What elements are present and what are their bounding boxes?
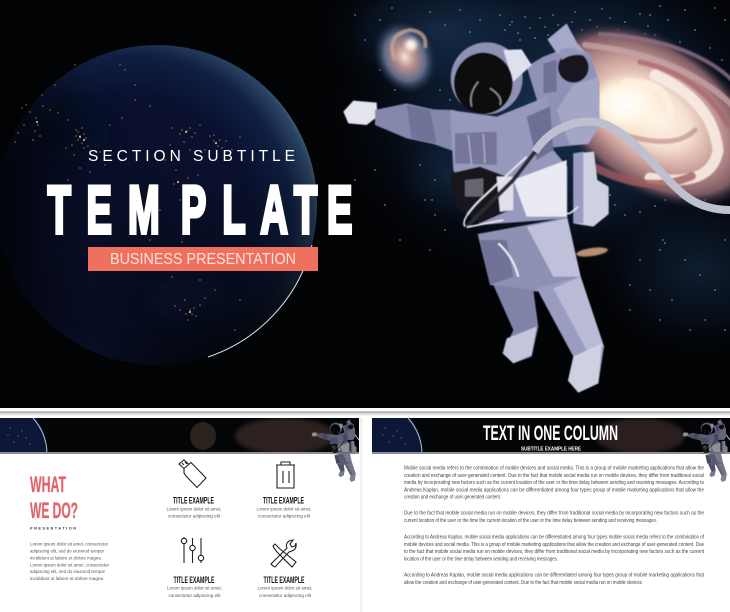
main title: A <box>260 171 288 248</box>
body text column: Andreas Kaplan, mobile social media applications can be differentiated among four types group of mobile marketing applications that allow the <box>404 488 704 494</box>
feature descriptions: Lorem ipsum dolor sit amet, <box>167 586 222 592</box>
right slide: mini astronaut <box>683 419 728 482</box>
feature titles <box>173 496 304 586</box>
galaxy: large spiral <box>553 24 730 206</box>
body text column: Mobile social media refers to the combination of mobile devices and social media. This is a group of mobile marketing applications that allow the <box>404 466 704 472</box>
feature titles: TITLE EXAMPLE <box>173 496 214 506</box>
right slide title: TEXT IN ONE COLUMN <box>483 422 618 445</box>
main title: L <box>222 171 246 248</box>
feature descriptions: consectetur adipiscing elit <box>168 593 221 599</box>
feature descriptions: Lorem ipsum dolor sit amet, <box>258 586 312 592</box>
right slide subtitle: SUBTITLE EXAMPLE HERE <box>521 446 581 452</box>
main slide background <box>0 0 730 408</box>
icon: tools <box>271 540 296 567</box>
body text column: According to Andreas Kaplan, mobile social media applications can be differentiated among four types group of mobile marketing applications that <box>404 572 704 578</box>
paragraph: adipiscing elit, sed do eiusmod tempor <box>30 548 104 554</box>
feature descriptions: Lorem ipsum dolor sit amet, <box>166 506 222 512</box>
banner: business presentation <box>88 247 318 271</box>
body text column: to the fact that mobile social media run on mobile devices, they differ from traditional social media by incorporating new factors such as the current <box>404 549 704 555</box>
paragraph: Lorem ipsum dolor sit amet, consectetur <box>30 542 108 548</box>
body text column: Due to the fact that mobile social media run on mobile devices, they differ from traditional social media by incorporating new factors such as the <box>404 510 704 516</box>
body text column: current location of the user or the time the current location of the user or the time delay between sending and receiving messages. <box>404 518 657 524</box>
galaxy: small spiral <box>376 23 434 92</box>
icon: usb drive <box>179 460 206 488</box>
main title: T <box>294 171 317 248</box>
body text column: allow the creation and exchange of user-generated content. Due to the fact that mobile social media run on mobile devices <box>404 580 642 586</box>
distant galaxy <box>576 246 608 258</box>
feature titles: TITLE EXAMPLE <box>263 496 304 506</box>
main title: E <box>327 171 352 248</box>
feature descriptions: Lorem ipsum dolor sit amet, <box>256 506 312 512</box>
heading: what we do: WE DO? <box>30 498 78 523</box>
right slide: header band <box>372 418 730 454</box>
presentation label: PRESENTATION <box>30 526 76 530</box>
body text column: creation and exchange of user-generated content. <box>404 494 501 500</box>
banner: business presentation: BUSINESS PRESENTATION <box>110 251 296 268</box>
main title: T <box>48 171 71 248</box>
left slide: mini astronaut <box>312 419 357 482</box>
heading: what we do <box>30 472 78 523</box>
main title: E <box>87 171 112 248</box>
paragraph: incididunt ut labore et dolore magna <box>30 576 103 582</box>
body text column <box>404 466 704 586</box>
main title: P <box>181 171 206 248</box>
left slide: header band <box>0 418 359 454</box>
feature titles: TITLE EXAMPLE <box>264 575 304 586</box>
body text column: creation and exchange of user-generated content. Due to the fact that mobile social media run on mobile devices, they differ from traditional social <box>404 473 704 479</box>
feature descriptions: consectetur adipiscing elit <box>259 593 312 599</box>
nebula and star field <box>345 0 730 334</box>
paragraph <box>30 542 109 582</box>
icon: sliders <box>181 537 204 563</box>
feature descriptions: consectetur adipiscing elit <box>258 514 311 520</box>
astronaut <box>343 23 730 393</box>
heading: what we do: WHAT <box>30 472 66 497</box>
paragraph: adipiscing elit, sed do eiusmod tempor <box>30 569 105 575</box>
feature descriptions: consectetur adipiscing elit <box>168 514 221 520</box>
tether hose <box>535 122 730 210</box>
feature titles: TITLE EXAMPLE <box>174 575 214 586</box>
planet earth <box>0 45 317 365</box>
icon: trash can <box>276 462 295 488</box>
paragraph: incididunt ut labore et dolore magna. <box>30 556 102 562</box>
feature descriptions <box>166 506 312 599</box>
main title: M <box>128 171 160 248</box>
city lights <box>15 65 240 330</box>
body text column: location of the user or the time delay between sending and receiving messages. <box>404 556 558 562</box>
slide separators <box>0 408 730 612</box>
section subtitle: SECTION SUBTITLE <box>88 148 295 165</box>
main title <box>48 171 352 248</box>
paragraph: Lorem ipsum dolor sit amet, consectetur <box>30 562 109 568</box>
